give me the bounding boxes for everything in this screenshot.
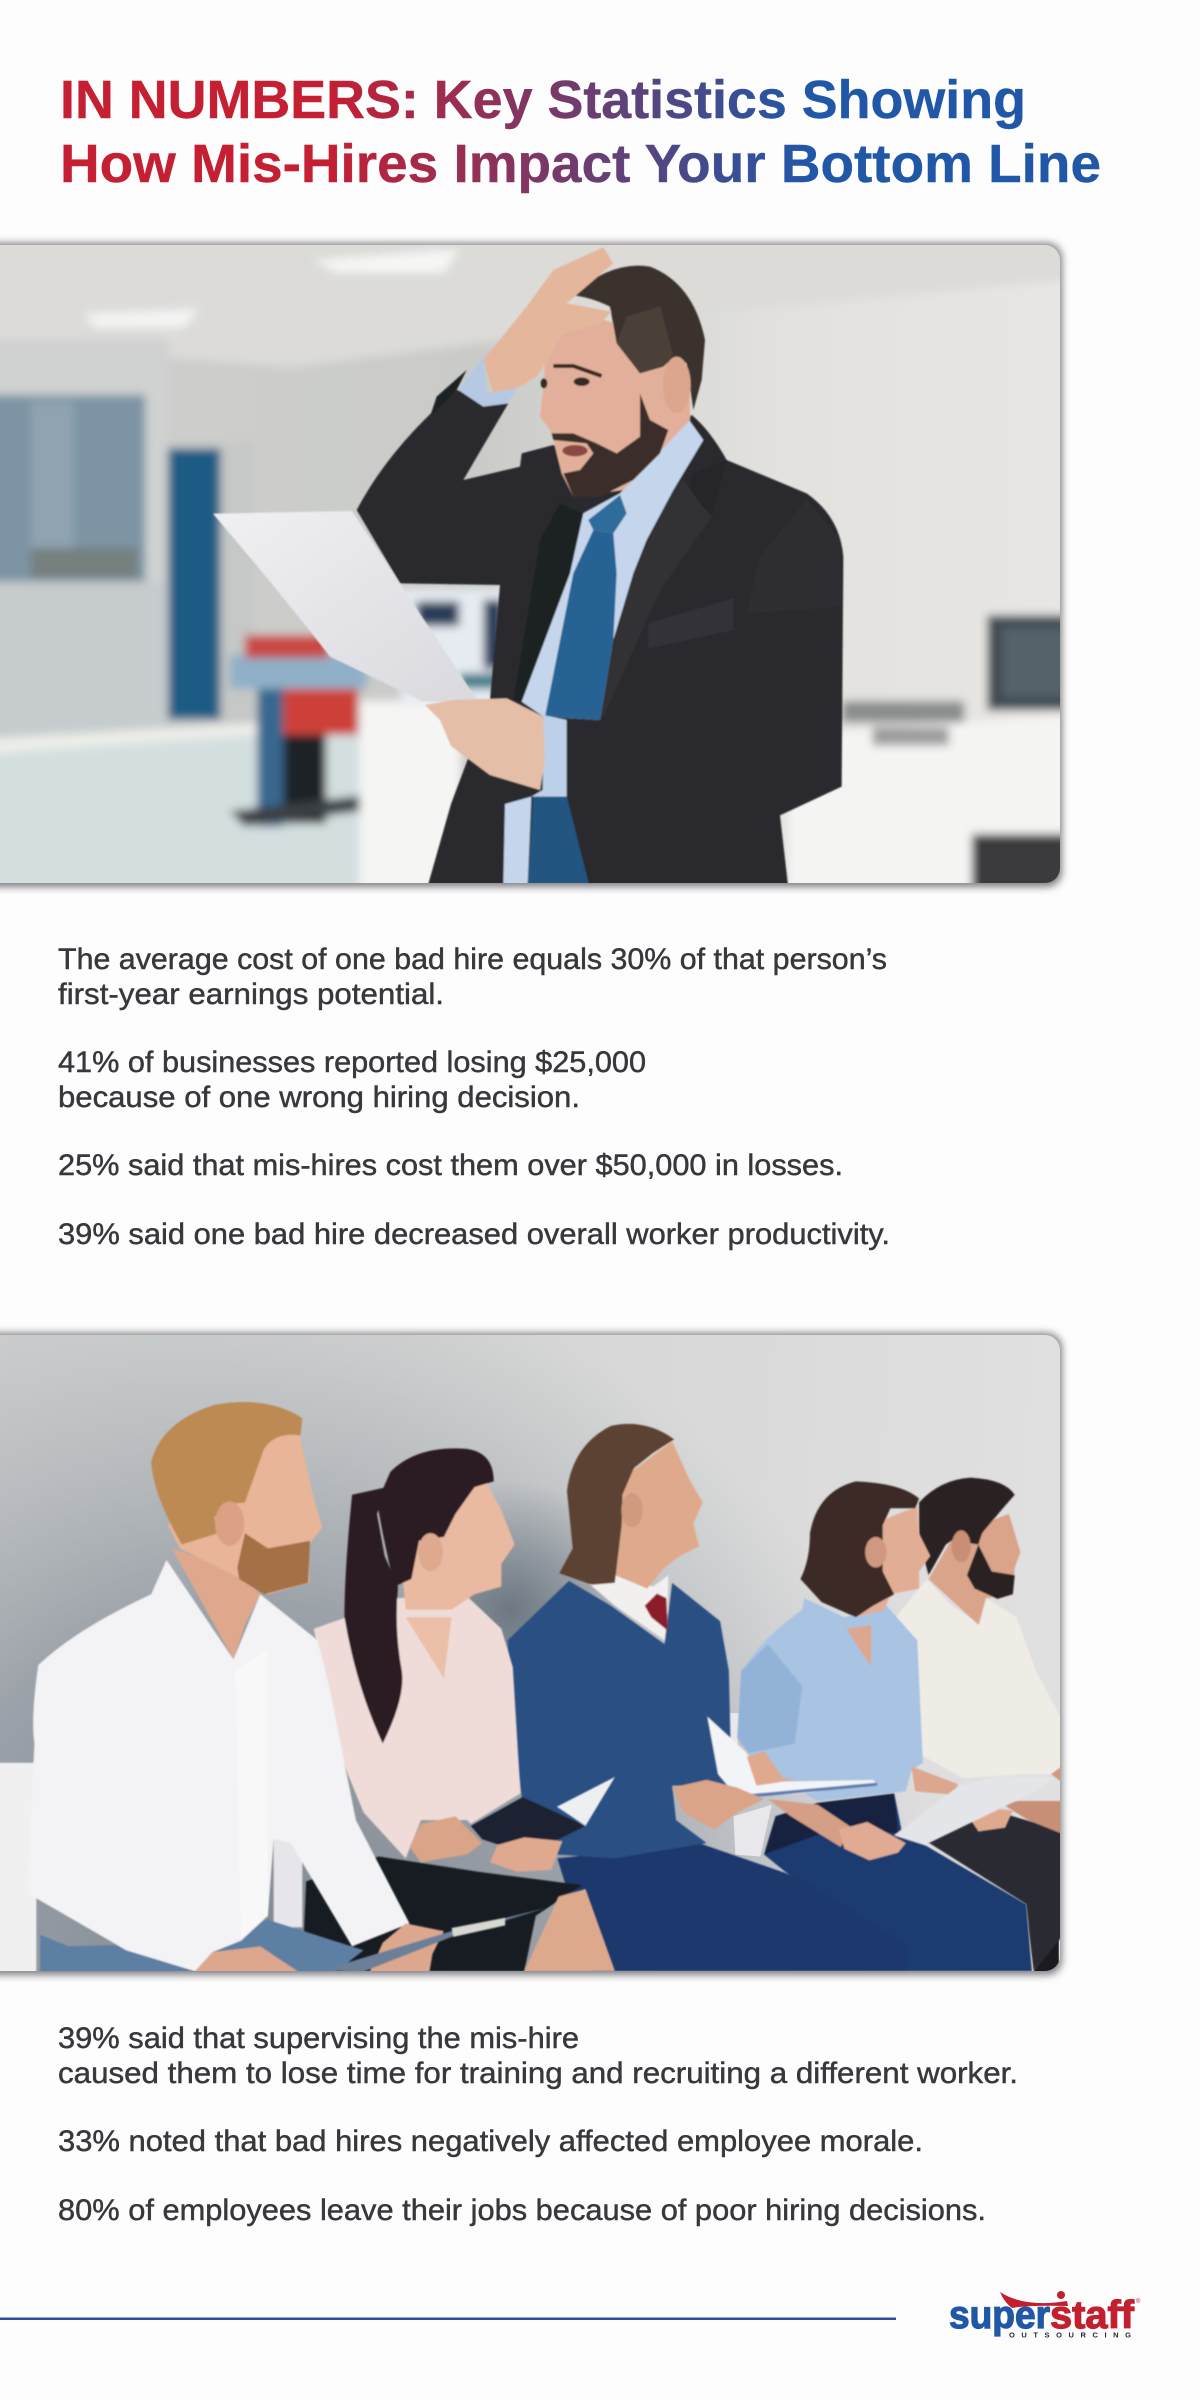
paper	[213, 511, 478, 702]
statistics text: first block: 39% said one bad hire decreased overall worker productivity.	[58, 1218, 890, 1251]
statistics text: first block: first-year earnings potential.	[58, 978, 444, 1011]
statistics text: second block: caused them to lose time for training and recruiting a different worker.	[58, 2057, 1018, 2090]
statistics text: first block: 41% of businesses reported losing $25,000	[58, 1046, 646, 1079]
lower hand	[425, 698, 545, 790]
clipboard and papers	[707, 1717, 877, 1797]
logo: SuperStaff Outsourcing: ®	[1136, 2298, 1141, 2305]
raised cuff	[458, 357, 517, 407]
person 2: woman in pink blouse with ponytail	[302, 1448, 615, 1971]
person 3: navy sweater and red tie	[508, 1424, 908, 1971]
wall	[0, 1335, 1060, 1971]
logo wordmark: super	[949, 2294, 1050, 2337]
logo: SuperStaff Outsourcing	[949, 2291, 1141, 2340]
statistics text: first block: because of one wrong hiring decision.	[58, 1081, 580, 1114]
logo: SuperStaff Outsourcing: OUTSOURCING	[1009, 2330, 1131, 2340]
tie	[545, 530, 617, 720]
face	[540, 310, 690, 497]
statistics text: second block	[58, 2022, 1018, 2227]
statistics text: second block: 80% of employees leave their jobs because of poor hiring decisions.	[58, 2194, 986, 2227]
person 4: blue shirt	[737, 1481, 1055, 1971]
raised hand	[483, 247, 613, 393]
clipboard	[325, 1908, 545, 1973]
person 5: white shirt, dark beard	[894, 1478, 1066, 1971]
notebook	[470, 1796, 586, 1846]
footer divider line	[0, 2318, 896, 2320]
person 1: white shirt, ginger hair and beard	[0, 1402, 545, 1977]
photo: five candidates seated in a row	[0, 1333, 1066, 1977]
statistics text: first block	[58, 943, 890, 1251]
title: IN NUMBERS: Key Statistics Showing	[60, 71, 1026, 130]
title: How Mis-Hires Impact Your Bottom Line	[60, 135, 1101, 194]
statistics text: first block: 25% said that mis-hires cost them over $50,000 in losses.	[58, 1149, 843, 1182]
jacket	[357, 390, 843, 885]
papers on lap	[894, 1780, 1018, 1846]
shirt	[522, 417, 703, 720]
logo: SuperStaff Outsourcing: staff	[1050, 2294, 1135, 2337]
beard	[552, 393, 668, 497]
hair	[570, 266, 705, 410]
blurred office background	[0, 245, 1060, 883]
title	[60, 71, 1101, 194]
statistics text: second block: 39% said that supervising the mis-hire	[58, 2022, 579, 2055]
man	[213, 247, 843, 885]
lower cuff	[531, 715, 567, 797]
photo: stressed businessman reading a paper in an office	[0, 237, 1068, 893]
statistics text: first block: The average cost of one bad hire equals 30% of that person’s	[58, 943, 887, 976]
white sofa	[0, 1763, 36, 1977]
statistics text: second block: 33% noted that bad hires negatively affected employee morale.	[58, 2125, 923, 2158]
sofa	[611, 1713, 1059, 1971]
logo swoosh	[1000, 2292, 1068, 2308]
eyes and brow	[574, 377, 590, 386]
